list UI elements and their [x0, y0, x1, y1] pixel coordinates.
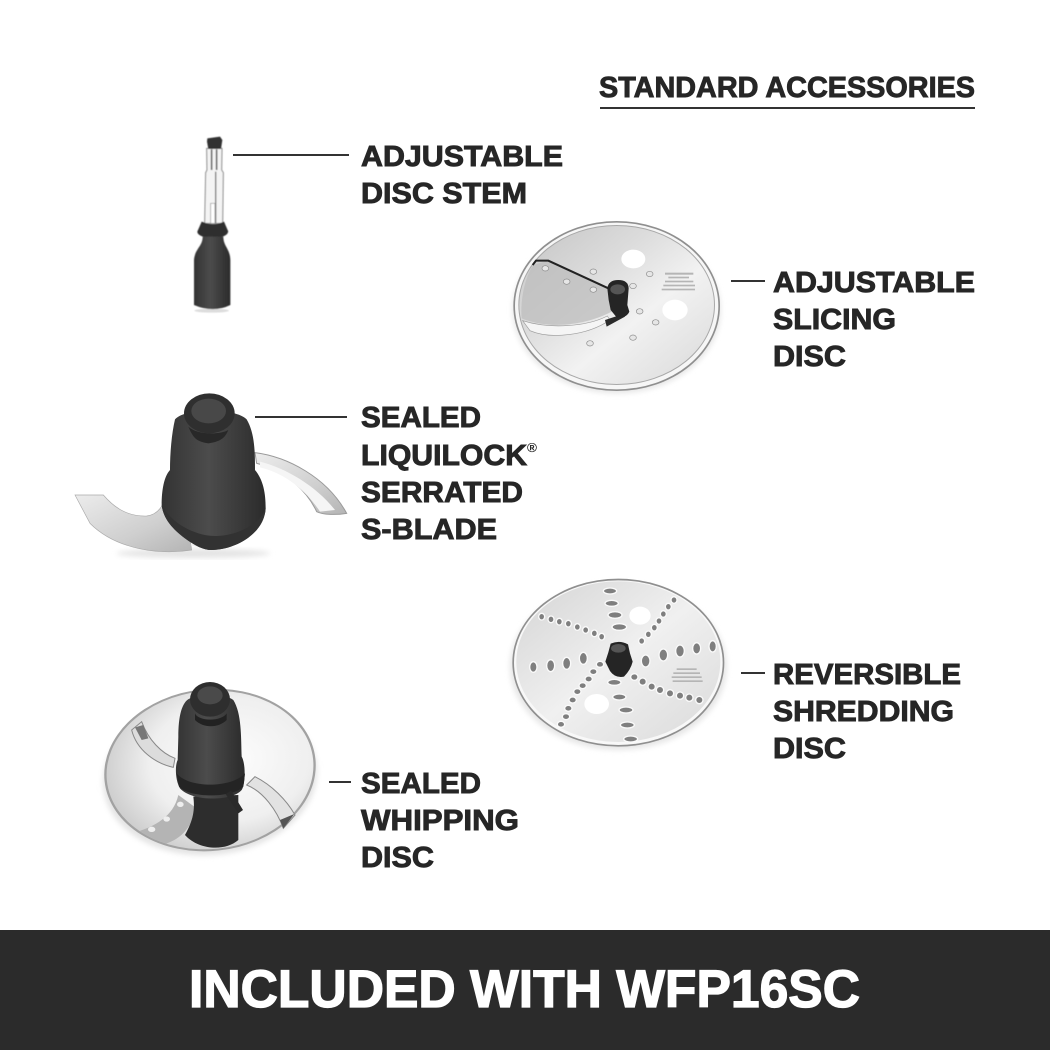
callout line: whipping disc	[329, 781, 351, 783]
icon: disc stem	[194, 137, 230, 313]
label: adjustable slicing disc: ADJUSTABLE	[773, 267, 975, 299]
panel: sealed whipping disc	[95, 678, 519, 874]
icon: s-blade	[75, 393, 347, 558]
heading: standard accessories: STANDARD ACCESSORIES	[599, 72, 975, 104]
label: adjustable disc stem: ADJUSTABLE	[361, 141, 563, 173]
label: sealed liquilock serrated s-blade: LIQUILOCK	[361, 440, 520, 472]
label: sealed whipping disc	[361, 768, 519, 874]
label: adjustable disc stem	[361, 141, 563, 210]
callout line: s-blade	[255, 416, 347, 418]
label: adjustable slicing disc: DISC	[773, 341, 846, 373]
callout line: slicing disc	[731, 280, 765, 282]
icon: shredding disc	[510, 579, 727, 750]
label: reversible shredding disc	[773, 659, 961, 765]
label: sealed liquilock serrated s-blade: SERRATED	[361, 477, 523, 509]
icon: slicing disc	[513, 221, 721, 393]
label: sealed liquilock serrated s-blade: ®	[527, 440, 537, 455]
panel: adjustable slicing disc	[513, 221, 975, 393]
label: reversible shredding disc: REVERSIBLE	[773, 659, 961, 691]
label: sealed whipping disc: WHIPPING	[361, 805, 519, 837]
label: adjustable slicing disc: SLICING	[773, 304, 896, 336]
label: sealed whipping disc: SEALED	[361, 768, 481, 800]
label: sealed liquilock serrated s-blade: SEALED	[361, 402, 481, 434]
label: adjustable slicing disc	[773, 267, 975, 373]
panel: sealed liquilock serrated s-blade	[75, 393, 537, 558]
label: sealed liquilock serrated s-blade: S-BLADE	[361, 514, 497, 546]
label: adjustable disc stem: DISC STEM	[361, 178, 527, 210]
footer banner	[0, 930, 1050, 1050]
icon: whipping disc	[102, 682, 318, 856]
label: reversible shredding disc: DISC	[773, 733, 846, 765]
panel: reversible shredding disc	[510, 579, 961, 765]
label: sealed liquilock serrated s-blade	[361, 402, 537, 546]
callout line: disc stem	[233, 154, 349, 156]
label: reversible shredding disc: SHREDDING	[773, 696, 954, 728]
footer banner: INCLUDED WITH WFP16SC	[189, 960, 860, 1019]
label: sealed whipping disc: DISC	[361, 842, 434, 874]
callout line: shredding disc	[741, 672, 765, 674]
panel: adjustable disc stem	[194, 137, 563, 313]
